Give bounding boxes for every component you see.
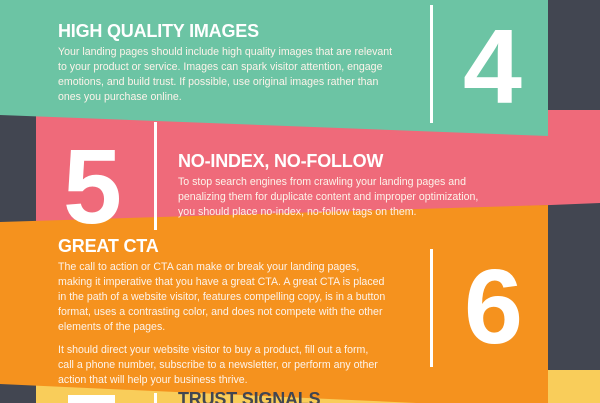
number 5: 5	[63, 128, 122, 246]
divider 6	[430, 249, 433, 367]
divider 7	[154, 393, 157, 403]
text: images body	[58, 46, 392, 103]
text: images body: ones you purchase online.	[58, 91, 182, 103]
text: no-index body: To stop search engines from crawling your landing pages and	[178, 176, 466, 188]
text: cta body: The call to action or CTA can make or break your landing pages,	[58, 261, 359, 273]
text: images body: emotions, and build trust. If possible, use original images rather than	[58, 76, 378, 88]
text: cta body: action that will help your business thrive.	[58, 374, 248, 386]
text: cta body: call a phone number, subscribe to a newsletter, or perform any other	[58, 359, 378, 371]
number 7 top	[68, 395, 115, 403]
text: cta body: elements of the pages. It should direct your website visitor to buy a product, fill out a form,	[58, 321, 368, 356]
heading: great cta: GREAT CTA	[58, 236, 159, 256]
text: images body: to your product or service. Images can spark visitor attention, engage	[58, 61, 382, 73]
number 6: 6	[464, 248, 523, 366]
text: no-index body	[178, 176, 478, 218]
number 4: 4	[463, 8, 522, 126]
panel: yellow bottom	[36, 370, 600, 403]
divider 4	[430, 5, 433, 123]
text: no-index body: penalizing them for duplicate content and improper optimization,	[178, 191, 478, 203]
text: cta body: making it imperative that you have a great CTA. A great CTA is placed	[58, 276, 384, 288]
panel: teal	[0, 0, 548, 136]
heading: high quality images: HIGH QUALITY IMAGES	[58, 21, 259, 41]
text: cta body: in the path of a website visitor, features compelling copy, is in a button	[58, 291, 385, 303]
text: no-index body: you should place no-index, no-follow tags on them.	[178, 206, 417, 218]
heading: no-index: NO-INDEX, NO-FOLLOW	[178, 151, 383, 171]
panel: orange	[0, 205, 548, 403]
text: cta body: format, uses a contrasting color, and does not compete with the other	[58, 306, 382, 318]
panel: yellow top strip	[36, 0, 210, 7]
text: images body: Your landing pages should include high quality images that are relevant	[58, 46, 392, 58]
divider 5	[154, 122, 157, 230]
panel: pink	[36, 110, 600, 226]
text: cta body	[58, 261, 385, 386]
